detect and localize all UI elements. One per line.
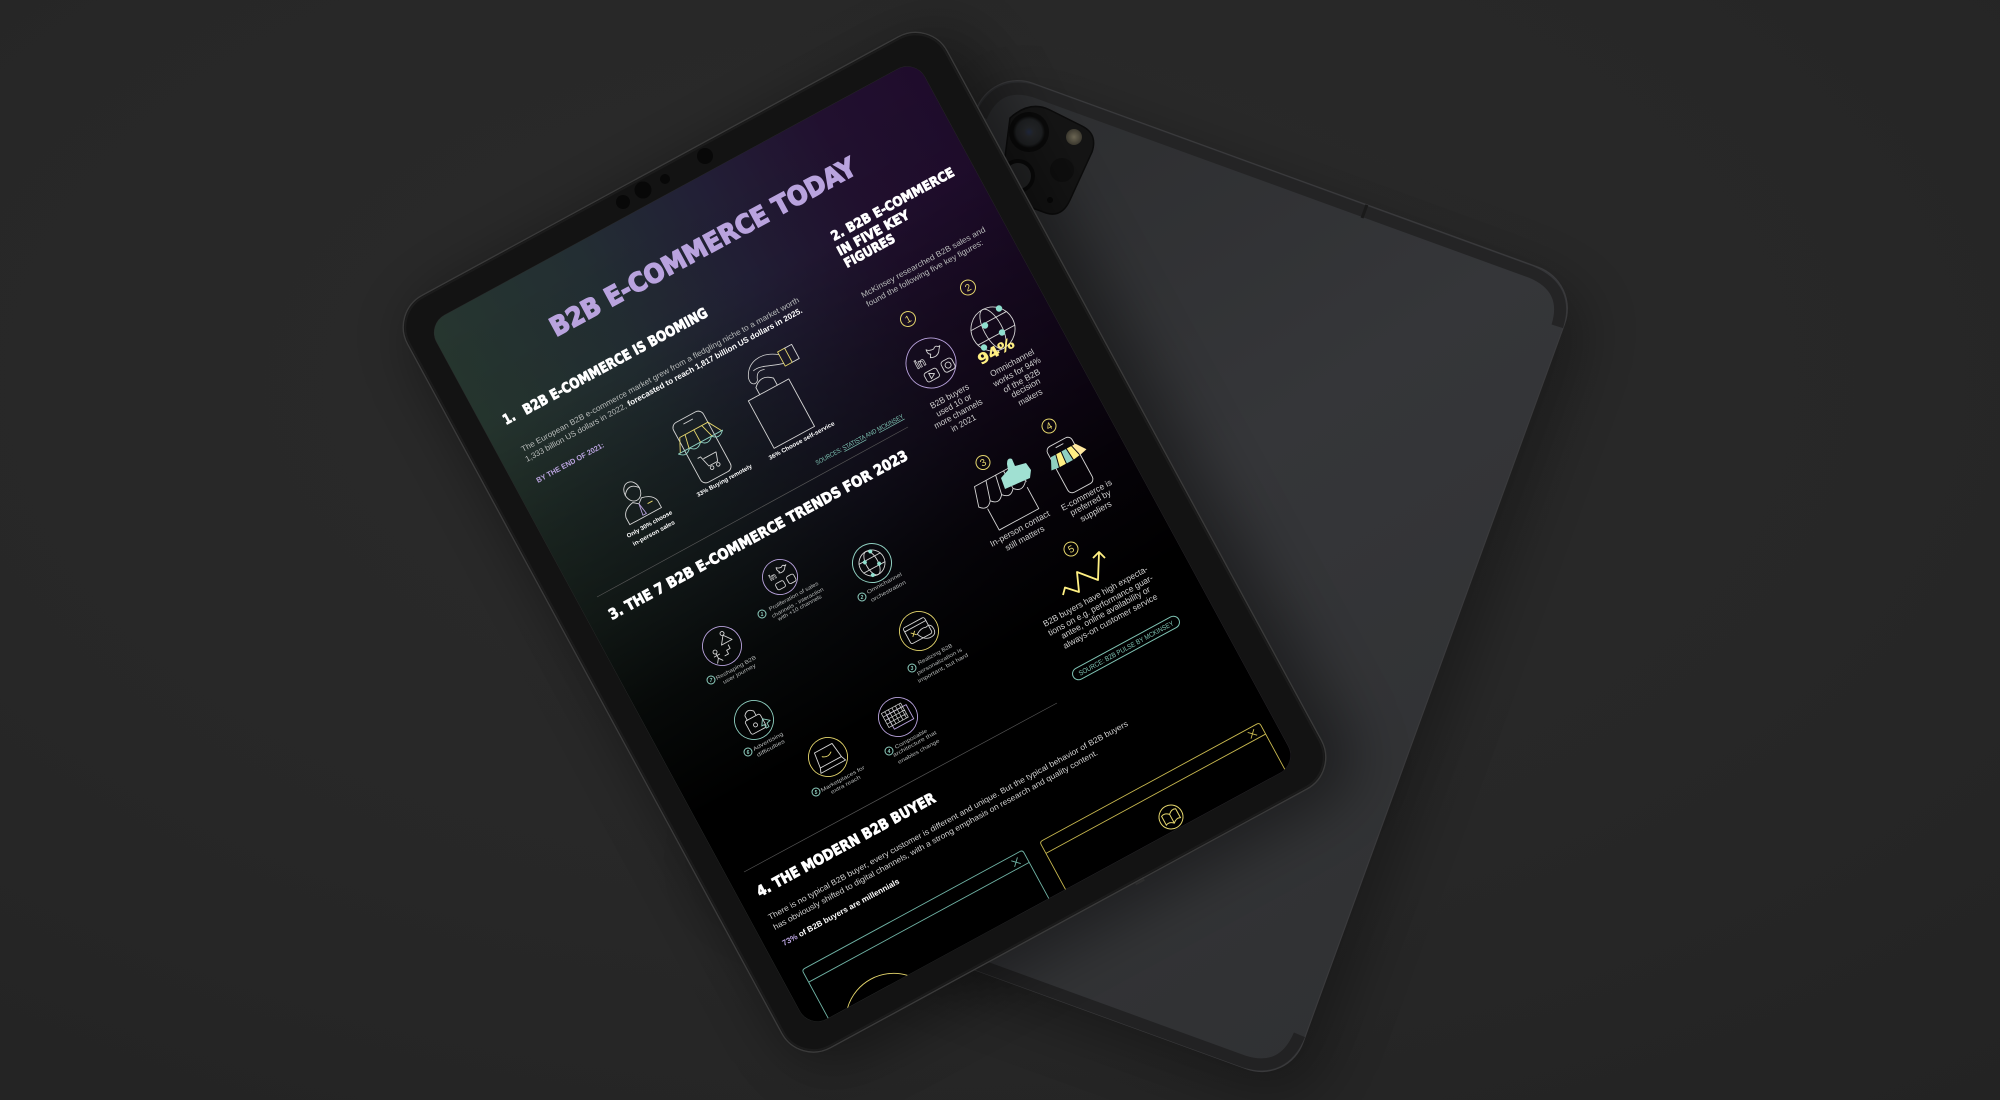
- heading 2: IN FIVE KEY: [835, 208, 913, 260]
- front cameras: [616, 148, 713, 209]
- number 2: 2: [963, 282, 974, 295]
- panel: section 4: [754, 719, 1304, 1090]
- number 4: [1042, 418, 1056, 434]
- label 2: Omnichannel: [988, 347, 1036, 379]
- sources: SOURCES: STATISTA AND MCKINSEY: [815, 413, 905, 467]
- trend 2: 2: [861, 595, 864, 601]
- icon: social channels: in: [912, 355, 928, 372]
- label: in-person: Only 30% choose: [626, 510, 674, 540]
- shadow: rear tablet: [702, 84, 1598, 1100]
- label 4: preferred by: [1068, 487, 1113, 518]
- number 3: [976, 455, 990, 470]
- stat: millennials: 73% of B2B buyers are millennials: [781, 877, 901, 948]
- intro text: 1,333 billion US dollars in 2022, forecasted to reach 1,817 billion US dollars in 2025.: [524, 306, 804, 464]
- trend 7: user journey: [722, 663, 758, 686]
- label 5: B2B buyers have high expecta-: [1041, 564, 1150, 629]
- trend 7: 7: [710, 678, 713, 684]
- trend 4: enables change: [897, 738, 941, 766]
- icon: phone shop: [672, 410, 732, 484]
- label 2: works for 94%: [990, 355, 1043, 389]
- trend 1: in: [767, 571, 778, 583]
- trend 1: 1: [761, 612, 764, 618]
- number 5: [1064, 542, 1078, 556]
- label 5: tions on e.g. performance guar-: [1046, 573, 1155, 638]
- source badge: SOURCE: B2B PULSE BY MCKINSEY: [1078, 620, 1175, 678]
- label 2: [990, 348, 1042, 406]
- bottom notch: [1135, 879, 1145, 885]
- label 5: always-on customer service: [1061, 591, 1159, 651]
- trend 2: Omnichannel: [866, 572, 903, 596]
- subheading: BY THE END OF 2021:: [535, 441, 606, 485]
- camera bump: [1000, 106, 1094, 214]
- trend 3: 3: [911, 666, 914, 672]
- icon: book: [1155, 801, 1187, 833]
- icon: phone with awning: [1046, 436, 1094, 494]
- trend 2: [846, 537, 907, 604]
- window: teal card: [802, 850, 1088, 1090]
- label 3: still matters: [1003, 523, 1046, 553]
- title: B2B E-COMMERCE TODAY: [545, 152, 863, 343]
- label 5: antee, online availability or: [1059, 584, 1152, 641]
- label 1: in 2021: [949, 412, 978, 434]
- trend 4: 4: [888, 749, 891, 755]
- icon: person: [623, 481, 662, 526]
- heading 2: 2. B2B E-COMMERCE: [829, 165, 957, 245]
- icon: store with thumbs up: [974, 458, 1040, 530]
- icon: globe: [970, 305, 1016, 352]
- trend 7: Reshaping B2B: [715, 655, 758, 682]
- number 1: 1: [903, 314, 914, 326]
- trend 4: [872, 691, 941, 766]
- panel: section 2: [829, 165, 1182, 682]
- trend 1: channels - interaction: [771, 587, 825, 620]
- label 1: more channels: [932, 396, 984, 431]
- label 2: makers: [1016, 386, 1044, 408]
- trend 6: 6: [747, 750, 750, 756]
- label 2: of the B2B: [1001, 366, 1042, 395]
- heading 1: B2B E-COMMERCE IS BOOMING: [520, 305, 711, 419]
- chart arc: [829, 956, 959, 1086]
- label 1: B2B buyers: [928, 381, 971, 411]
- trend 4: architecture that: [892, 730, 938, 759]
- label 4: E-commerce is: [1059, 477, 1114, 513]
- trend 5: extra reach: [830, 775, 862, 796]
- trend 2: orchestration: [870, 580, 907, 604]
- stat 94%: 94%: [975, 335, 1018, 369]
- number 3: 3: [978, 457, 989, 470]
- heading 4: 4. THE MODERN B2B BUYER: [754, 791, 939, 901]
- trend 1: [756, 553, 825, 623]
- shadow: front tablet: [396, 15, 1373, 1085]
- label: in-person: in-person sales: [632, 520, 677, 548]
- number 1: [900, 311, 916, 327]
- rear tablet: [700, 68, 1580, 1084]
- label 2: decision: [1009, 376, 1042, 400]
- trend 4: Composable: [894, 728, 929, 751]
- intro text 4: There is no typical B2B buyer, every customer is different and unique. But the typical behavior of B2B buyers: [767, 719, 1130, 922]
- trend 6: difficulties: [756, 739, 786, 759]
- intro text 2: McKinsey researched B2B sales and: [860, 225, 987, 300]
- window: yellow card: [1040, 723, 1304, 925]
- label 4: suppliers: [1078, 499, 1113, 524]
- number 4: 4: [1044, 421, 1055, 433]
- trend 6: Advertising: [752, 731, 784, 753]
- label 1: [930, 385, 982, 432]
- number 5: 5: [1066, 544, 1077, 556]
- trend 3: Realizing B2B: [917, 643, 954, 667]
- intro text: The European B2B e-commerce market grew from a fledgling niche to a market worth: [520, 296, 801, 454]
- icon: social channels: [906, 338, 956, 388]
- panel: section 3: [606, 448, 970, 796]
- label 1: used 10 or: [934, 391, 973, 419]
- heading 3: 3. THE 7 B2B E-COMMERCE TRENDS FOR 2023: [606, 448, 911, 624]
- front tablet frame: [390, 20, 1339, 1065]
- heading 2: [829, 165, 957, 272]
- screen gradient: [427, 59, 1297, 1028]
- panel: section 1: [500, 296, 905, 548]
- heading 2: FIGURES: [842, 232, 898, 272]
- trend 3: [893, 605, 970, 685]
- heading 1: [500, 305, 711, 429]
- screen: [427, 59, 1304, 1090]
- trend 5: Marketplaces for: [820, 765, 866, 794]
- trend 1: Proliferation of sales: [768, 581, 820, 613]
- trend 3: personalization is: [916, 647, 964, 677]
- intro text 2: found the following five key figures:: [865, 238, 985, 309]
- label 4: [1060, 480, 1112, 522]
- icon: rising arrow: [1063, 552, 1105, 595]
- heading 1: 1.: [500, 409, 518, 429]
- label 3: In-person contact: [988, 508, 1052, 549]
- label: self-service: 36% Choose self-service: [768, 421, 837, 462]
- icon: shopping bag and hand: [748, 344, 815, 449]
- trend 7: [696, 620, 758, 686]
- trend 5: [802, 731, 866, 796]
- trend 1: with +10 channels: [776, 594, 823, 623]
- trend 5: 5: [815, 790, 818, 796]
- intro text 4: has obviously shifted to digital channels, with a strong emphasis on research and quality content.: [772, 748, 1099, 932]
- number 2: [960, 280, 976, 296]
- label: remote: 33% Buying remotely: [696, 464, 754, 499]
- trend 3: important, but hard: [917, 653, 970, 685]
- trend 6: [728, 694, 786, 759]
